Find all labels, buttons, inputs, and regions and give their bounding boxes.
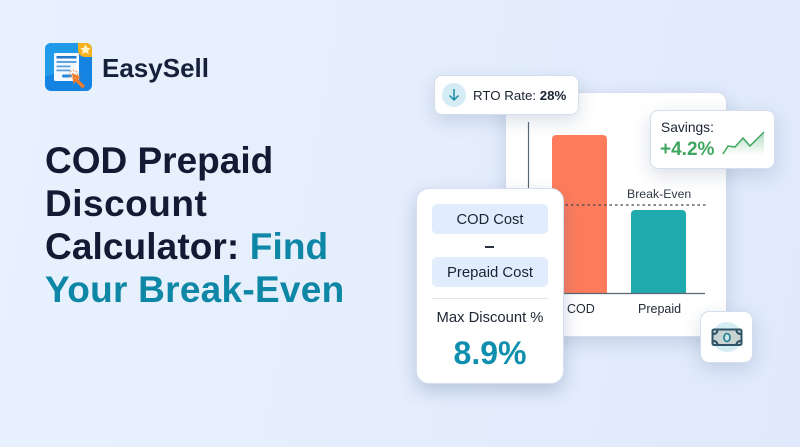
value: max discount: 8.9%: [454, 335, 526, 371]
chart: bars and axes: [528, 122, 706, 294]
label: break-even: Break-Even: [627, 187, 691, 201]
title: [45, 140, 344, 310]
callout: RTO rate: [434, 75, 579, 115]
icon: banknote: [712, 322, 742, 352]
value: savings: +4.2%: [660, 139, 714, 160]
icon: down arrow: [442, 83, 466, 107]
text: RTO rate value: RTO Rate: 28%: [473, 88, 566, 103]
icon: form app logo: [45, 43, 92, 91]
brand name: EasySell: [102, 53, 209, 83]
icon: trend sparkline: [722, 132, 764, 154]
label: max discount: Max Discount %: [437, 310, 543, 326]
label: savings: Savings:: [661, 120, 714, 135]
label: COD: COD: [567, 302, 595, 316]
logo: [45, 43, 209, 91]
title: Calculator: Find: [45, 226, 328, 267]
callout: savings: [650, 110, 775, 169]
box: COD cost: [432, 204, 548, 234]
box: prepaid cost: [432, 257, 548, 287]
box: prepaid cost: Prepaid Cost: [447, 265, 533, 281]
panel: bar chart: [505, 92, 727, 337]
card: money icon: [700, 311, 753, 363]
panel: formula card: [416, 188, 564, 384]
title: COD Prepaid: [45, 140, 273, 181]
operator: minus: [485, 246, 494, 248]
title: Discount: [45, 183, 207, 224]
box: COD cost: COD Cost: [457, 212, 523, 228]
label: Prepaid: Prepaid: [638, 302, 681, 316]
title: Your Break-Even: [45, 269, 344, 310]
